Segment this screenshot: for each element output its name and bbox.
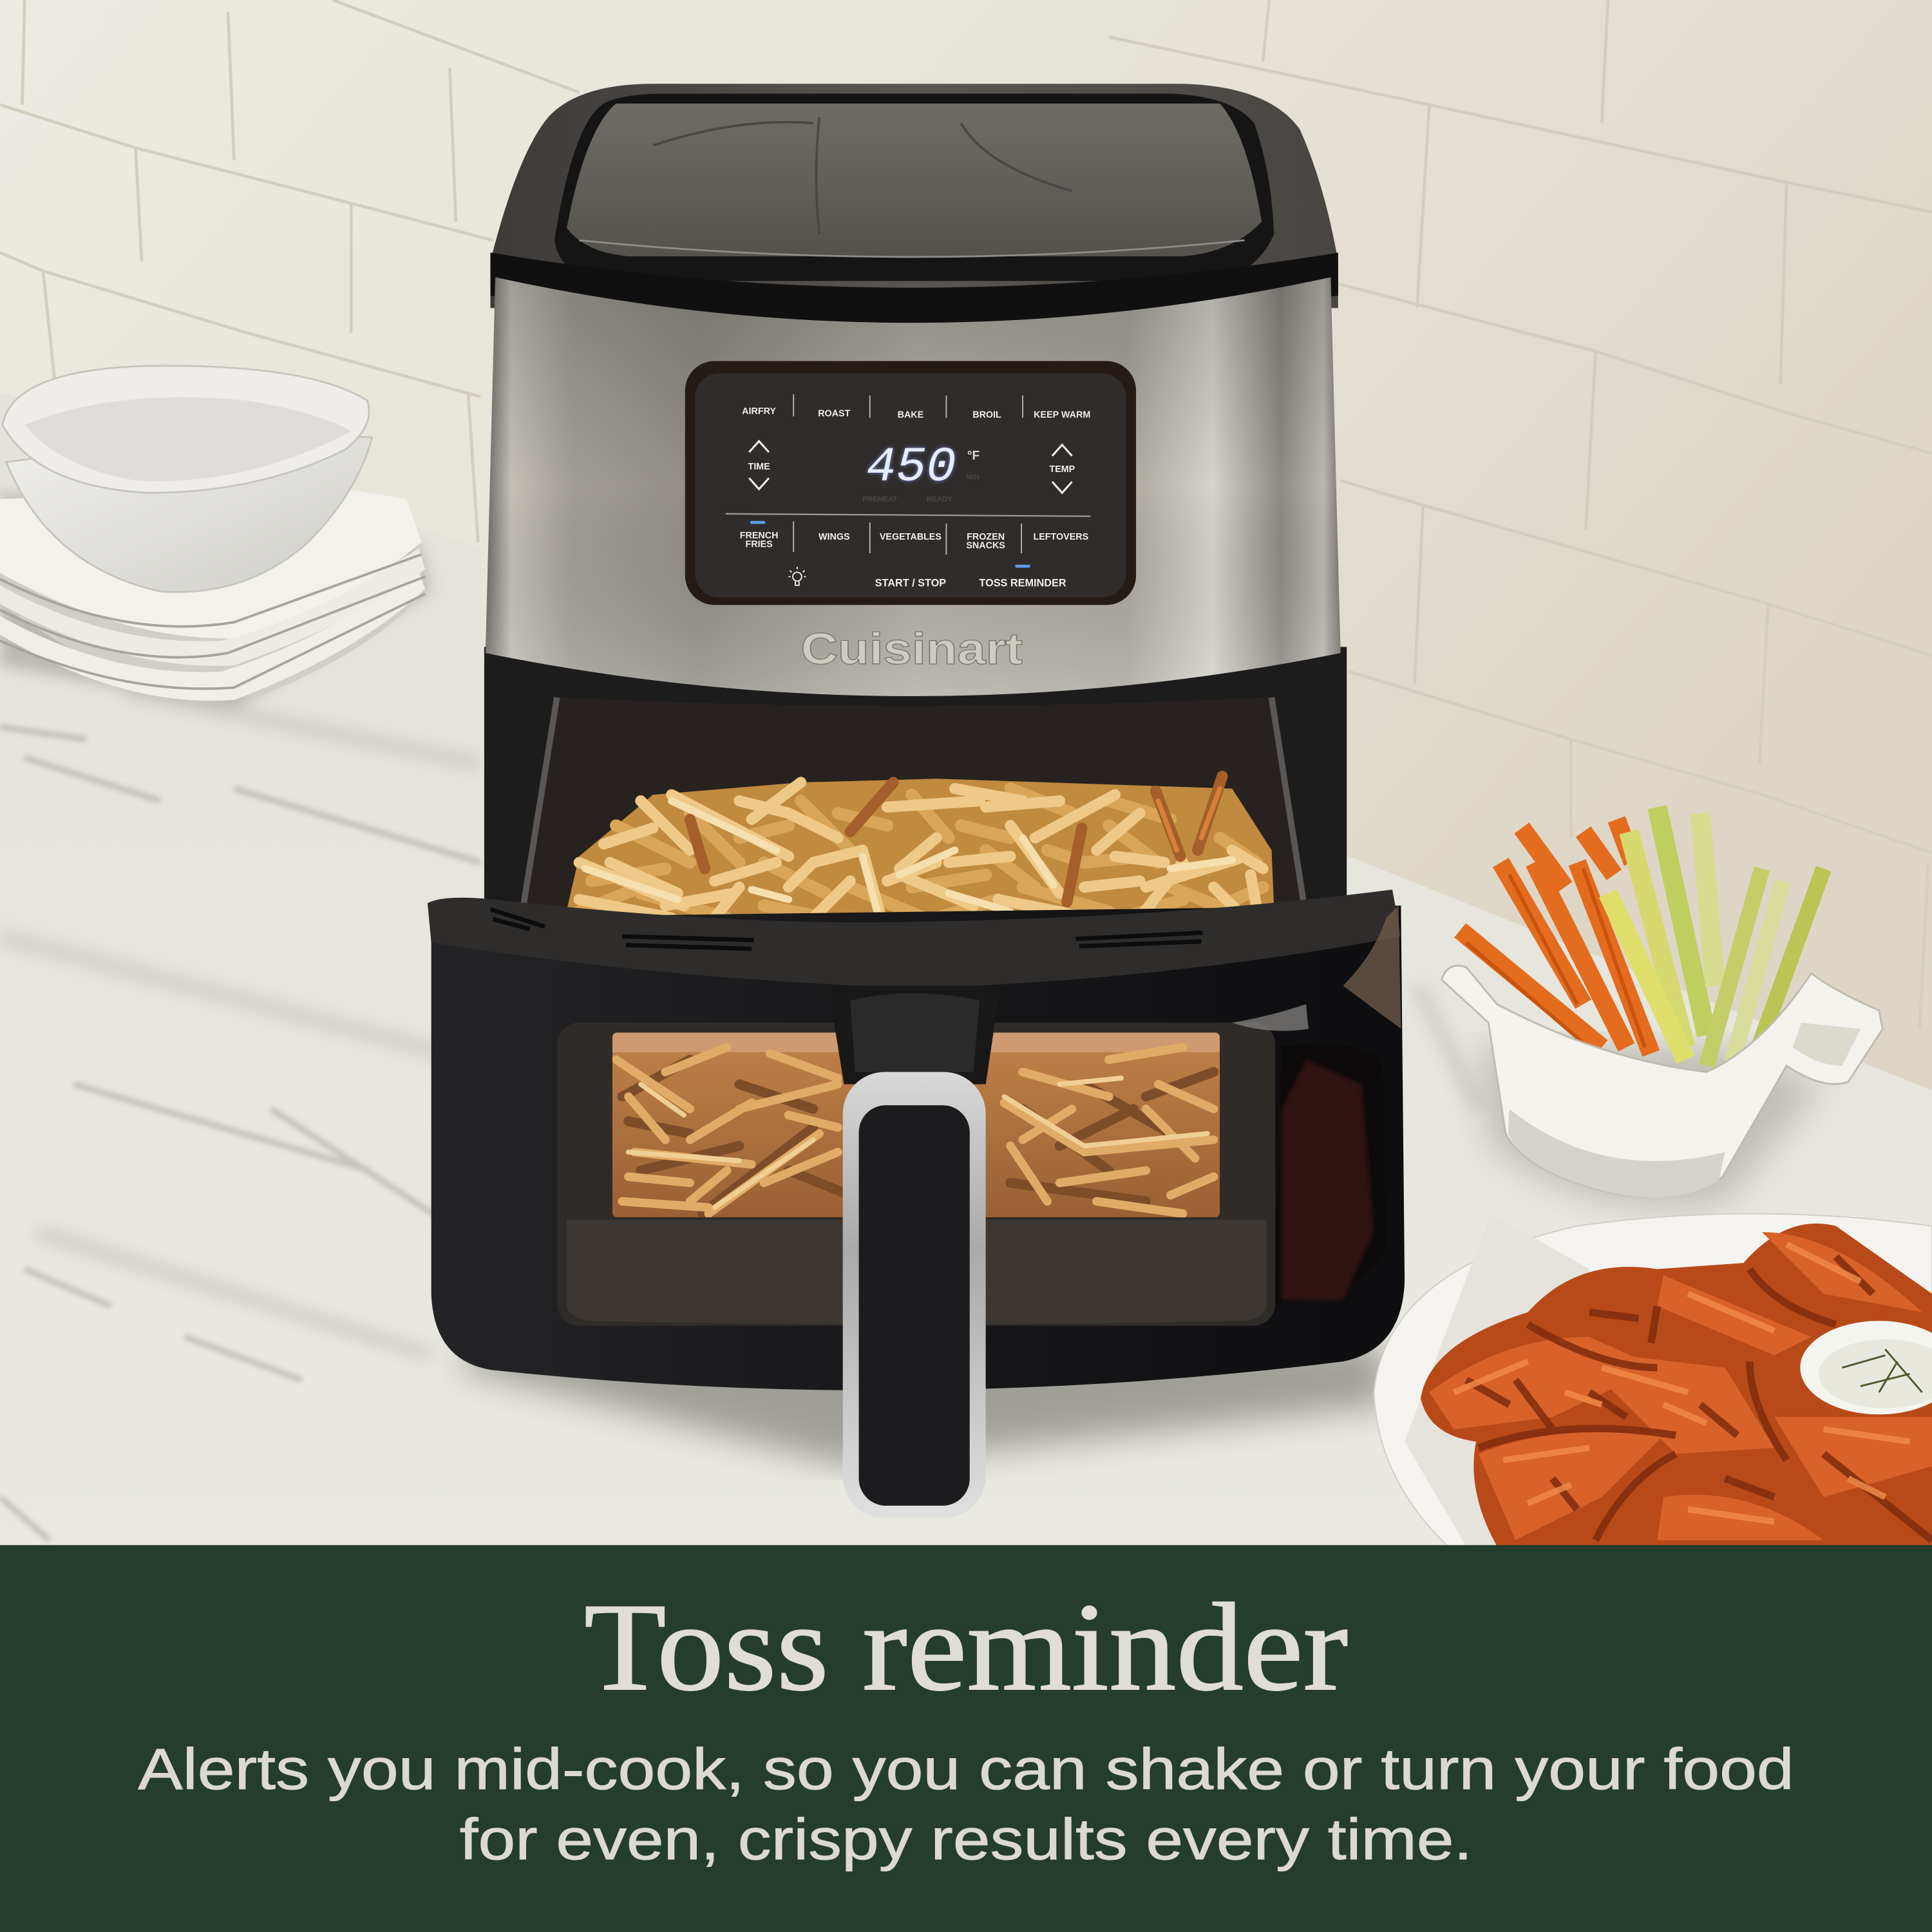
shadow under plates xyxy=(0,493,431,708)
mode labels: START / STOP xyxy=(875,578,946,589)
plate xyxy=(1374,1214,1932,1546)
brand logo: Cuisinart xyxy=(801,624,1023,674)
oven cavity xyxy=(520,697,1309,918)
mode labels: TOSS REMINDER xyxy=(979,578,1066,589)
lower black housing xyxy=(484,647,1347,905)
mode labels: TEMP xyxy=(1049,464,1075,475)
faint preheat labels: PREHEAT xyxy=(862,496,897,504)
wings plate xyxy=(1374,1214,1932,1546)
mode labels: WINGS xyxy=(819,532,850,542)
steel control band xyxy=(486,277,1341,696)
blue indicator lights xyxy=(752,522,1029,566)
mode labels: BAKE xyxy=(898,410,923,421)
parchment xyxy=(1405,1214,1589,1546)
mode labels: BROIL xyxy=(972,410,1001,421)
lid top xyxy=(490,84,1338,308)
fries through window xyxy=(612,1032,1220,1217)
faint preheat labels xyxy=(862,473,980,504)
air fryer xyxy=(428,84,1405,1518)
carrots xyxy=(1460,819,1651,1054)
time and temp arrows xyxy=(749,441,1072,493)
mode labels: ROAST xyxy=(818,409,851,419)
title: Toss reminder xyxy=(584,1578,1348,1717)
dip cup xyxy=(1800,1321,1932,1414)
basket rim xyxy=(428,889,1401,988)
faint preheat labels: READY xyxy=(927,496,952,504)
upper bowl xyxy=(3,366,369,493)
display reading 450: 450 xyxy=(866,439,956,495)
faint preheat labels: MIN xyxy=(966,473,980,481)
plates xyxy=(0,487,425,701)
mode labels: TIME xyxy=(748,462,770,472)
handle xyxy=(828,986,1001,1518)
black lid band xyxy=(490,252,1338,339)
bottom caption band xyxy=(0,1545,1932,1932)
mode labels: FRENCH xyxy=(740,531,778,541)
icon: light bulb xyxy=(788,567,806,585)
basket window xyxy=(557,1023,1275,1326)
celery xyxy=(1657,807,1707,1035)
veggie bowl xyxy=(1442,807,1882,1198)
tiled wall xyxy=(0,0,1932,1109)
shadow under air fryer xyxy=(456,1331,1392,1466)
fries in open basket xyxy=(561,776,1275,936)
marble countertop xyxy=(0,689,1932,1546)
white dish xyxy=(1442,966,1882,1197)
wings xyxy=(1421,1224,1932,1546)
display reading 450: 450 xyxy=(866,439,956,495)
mode labels: KEEP WARM xyxy=(1034,410,1090,421)
mode labels xyxy=(740,406,1090,589)
degrees F: °F xyxy=(967,450,980,463)
mode labels: FRIES xyxy=(745,539,773,549)
mode labels: VEGETABLES xyxy=(880,532,942,542)
panel dividers xyxy=(793,394,1023,554)
description xyxy=(138,1738,1794,1872)
stacked plates and bowls xyxy=(0,366,425,701)
mode labels: FROZEN xyxy=(967,532,1005,542)
mode labels: AIRFRY xyxy=(742,406,776,417)
mode labels: SNACKS xyxy=(966,540,1005,551)
basket body xyxy=(431,905,1405,1390)
mode labels: LEFTOVERS xyxy=(1033,532,1088,542)
right side reflection xyxy=(1232,905,1401,1303)
shadow under veggie dish xyxy=(1479,1047,1824,1207)
description: for even, crispy results every time. xyxy=(460,1808,1472,1872)
description: Alerts you mid-cook, so you can shake or turn your food xyxy=(138,1738,1794,1802)
lower bowl xyxy=(6,431,372,592)
control panel xyxy=(685,361,1136,605)
